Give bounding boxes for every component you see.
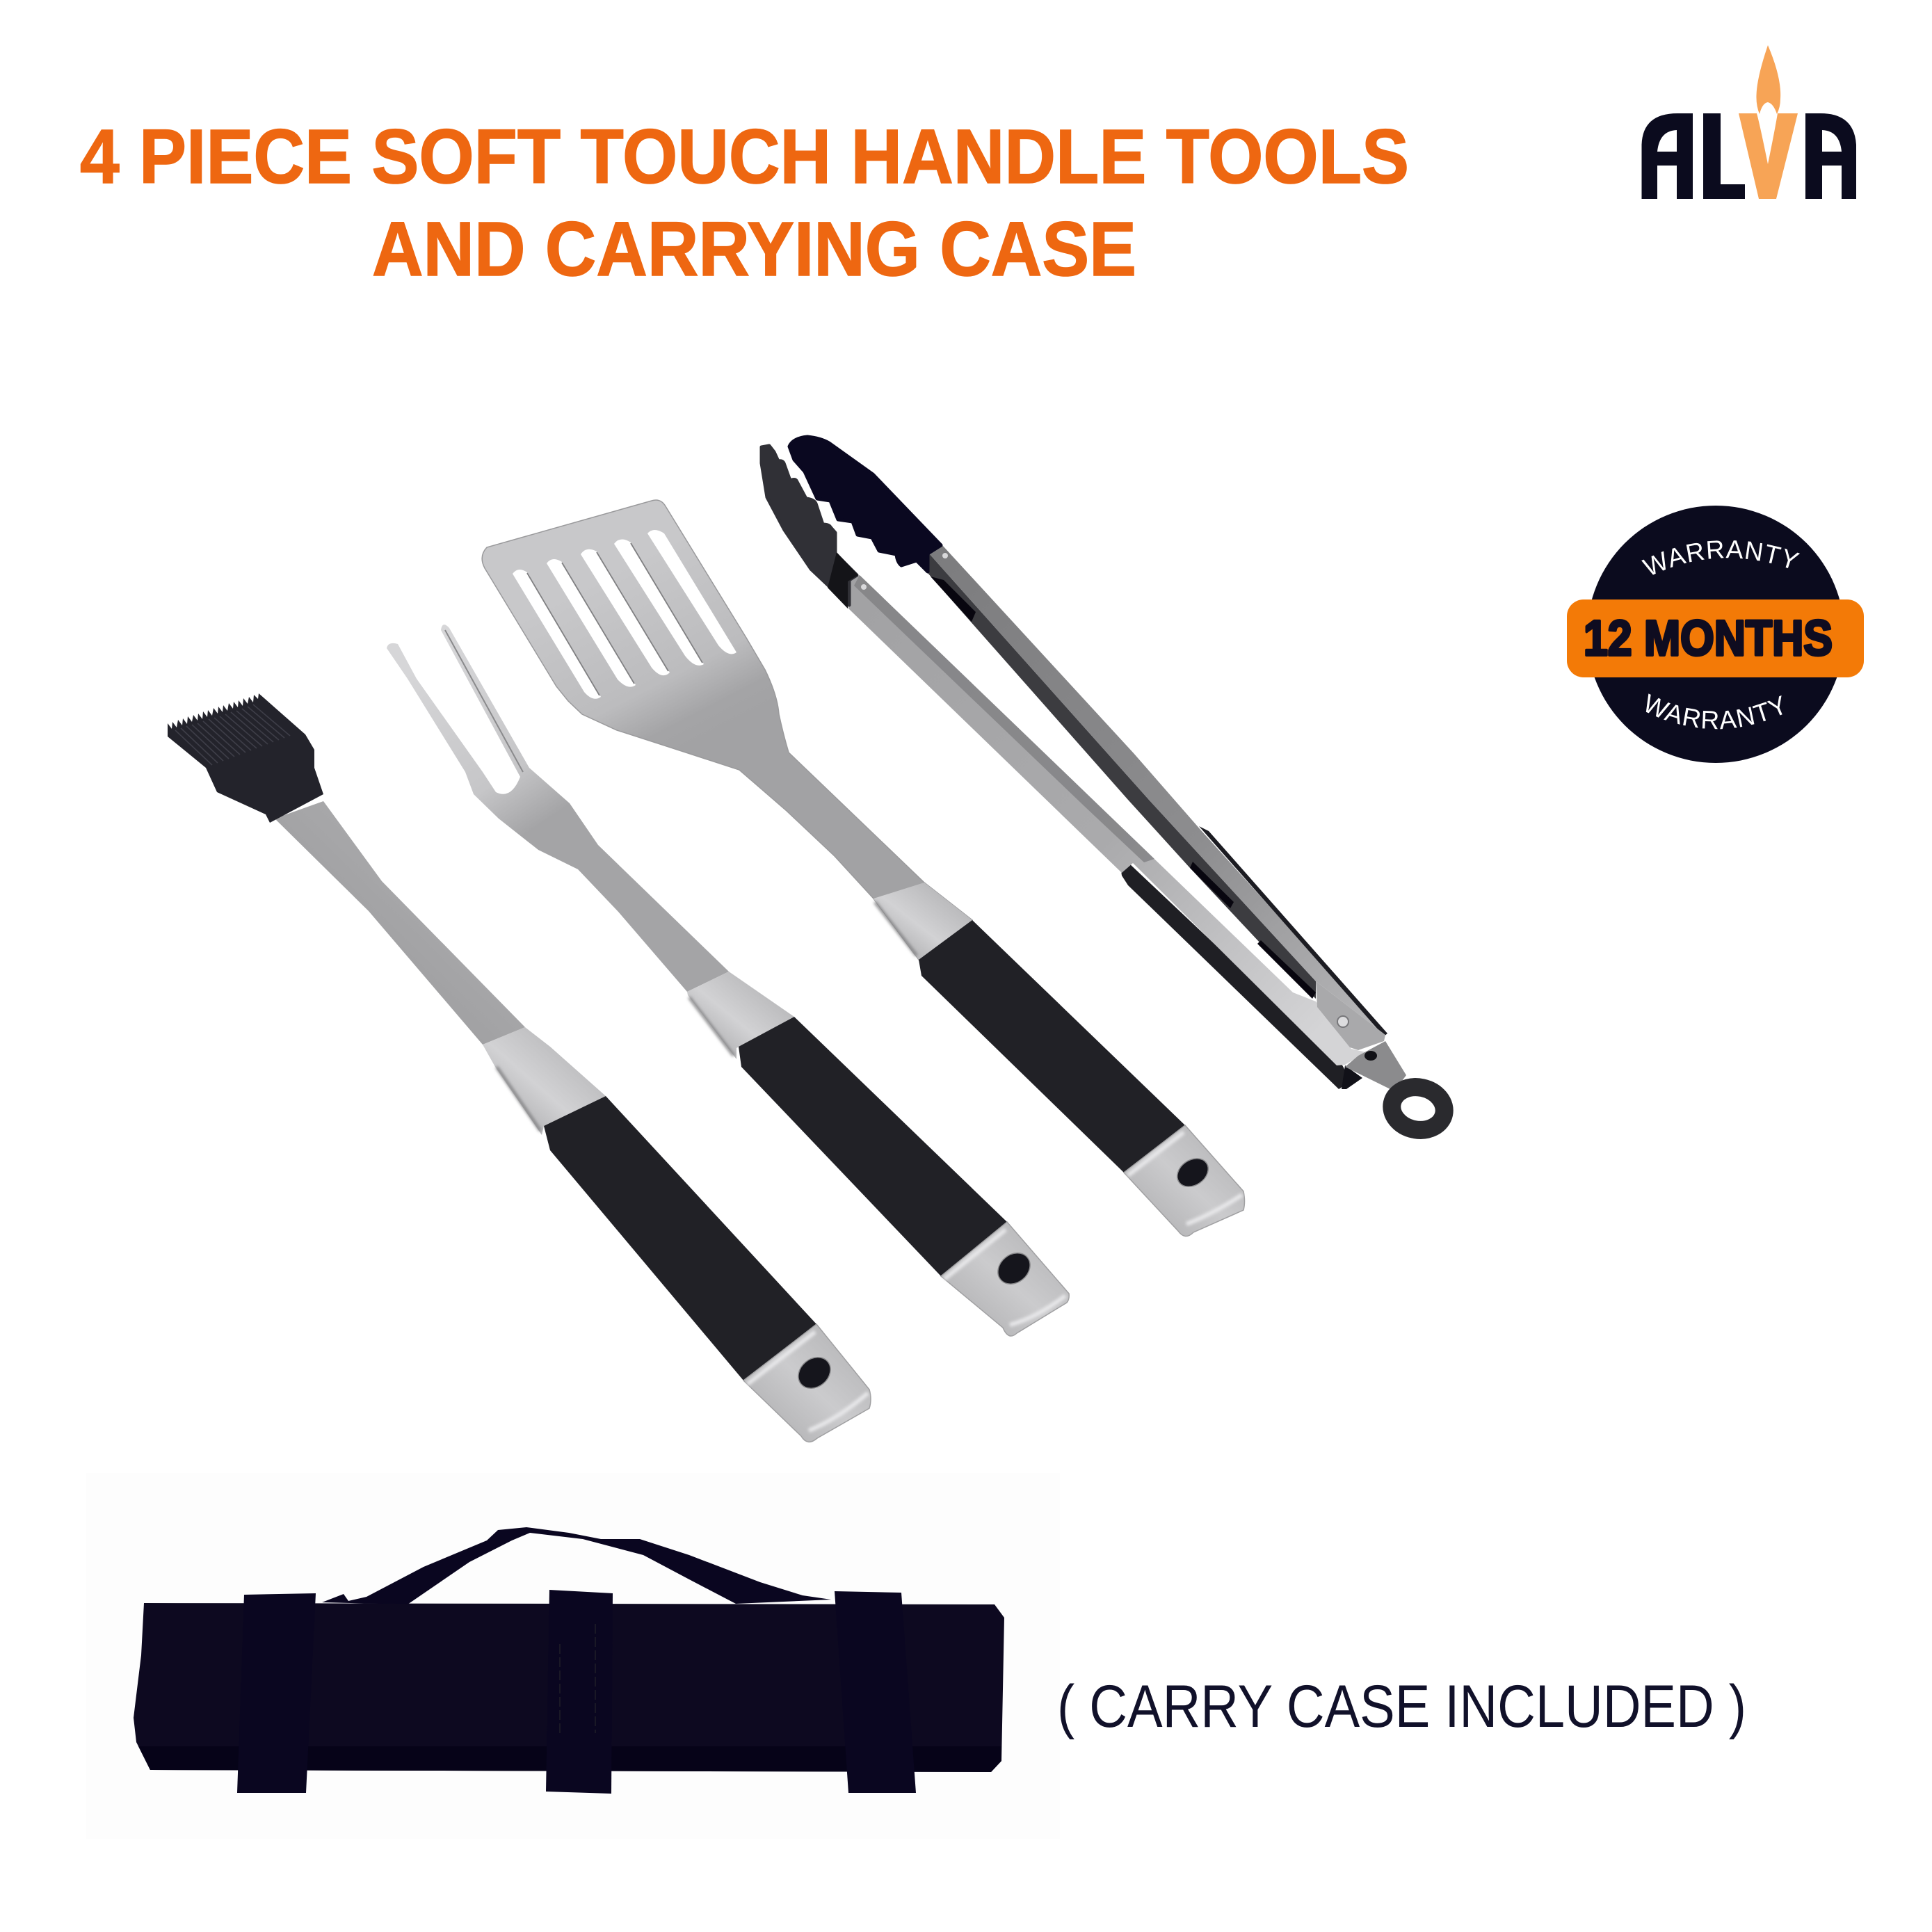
fork hanging hole [992, 1247, 1036, 1290]
tongs upper arm inner shadow [928, 554, 1316, 999]
brush bristle lines [175, 705, 290, 765]
title: 4 PIECE SOFT TOUCH HANDLE TOOLS [80, 114, 1409, 200]
brush ferrule edge [497, 1067, 540, 1131]
tongs lower head base shadow [828, 552, 858, 609]
tongs lower grip [1121, 862, 1346, 1089]
brush shaft [275, 801, 525, 1045]
tongs locking plate [1316, 981, 1385, 1050]
tongs lower arm [848, 575, 1366, 1065]
fork ferrule edge [689, 997, 734, 1056]
tongs upper arm [929, 545, 1385, 1035]
carry case strap stitching [560, 1624, 595, 1733]
brush ferrule [483, 1027, 606, 1135]
spatula soft touch grip [919, 920, 1185, 1173]
slotted spatula [482, 500, 1245, 1237]
fork head [387, 625, 729, 992]
fork tine edge [445, 630, 523, 772]
carry case lower shadow band [138, 1746, 1001, 1772]
tongs lower silicone head [762, 446, 857, 605]
fork ferrule [687, 972, 794, 1059]
spatula blade and neck [482, 500, 972, 960]
spatula hanging hole [1172, 1152, 1214, 1193]
tongs rivet [1337, 1016, 1349, 1027]
tongs lower end shadow [1342, 1065, 1362, 1089]
carry case roll body [134, 1603, 1004, 1772]
fork handle end [941, 1222, 1069, 1336]
title: AND CARRYING CASE [372, 207, 1136, 292]
tongs upper arm black reflections [931, 577, 1316, 999]
spatula end highlights [1128, 1132, 1242, 1224]
carry case straps [237, 1590, 916, 1794]
brush hanging hole [792, 1351, 837, 1394]
brush soft touch grip [544, 1096, 816, 1380]
warranty badge: WARRANTY [1645, 693, 1782, 729]
warranty badge: WARRANTY [1641, 540, 1800, 574]
spatula slots [513, 530, 736, 699]
warranty badge [1567, 506, 1864, 763]
spatula ferrule edge [875, 902, 917, 956]
title [80, 114, 1409, 292]
carry case handle [322, 1527, 831, 1604]
carry case caption: ( CARRY CASE INCLUDED ) [1057, 1673, 1746, 1740]
basting brush [168, 693, 871, 1442]
logo: ALVA [1641, 45, 1856, 199]
silicone brush head [168, 693, 323, 823]
meat fork [387, 625, 1069, 1336]
tongs rivets [861, 553, 948, 590]
warranty badge: 12 MONTHS [1584, 611, 1833, 666]
tongs tab hole [1365, 1051, 1377, 1061]
fork soft touch grip [739, 1017, 1007, 1276]
tongs pull tab [1345, 1041, 1406, 1091]
brush end highlights [748, 1332, 868, 1431]
carry case image panel [86, 1473, 1060, 1839]
tongs lower arm top facet [854, 575, 1154, 862]
fork end highlights [944, 1230, 1065, 1325]
tongs upper silicone head [789, 437, 941, 572]
kitchen tongs [762, 437, 1449, 1135]
brush handle end [743, 1324, 871, 1442]
tongs hanging ring [1387, 1082, 1449, 1135]
spatula slot edges [527, 543, 702, 695]
spatula ferrule [874, 883, 972, 960]
tongs outer black strip [1199, 826, 1387, 1036]
spatula handle end [1124, 1125, 1245, 1237]
